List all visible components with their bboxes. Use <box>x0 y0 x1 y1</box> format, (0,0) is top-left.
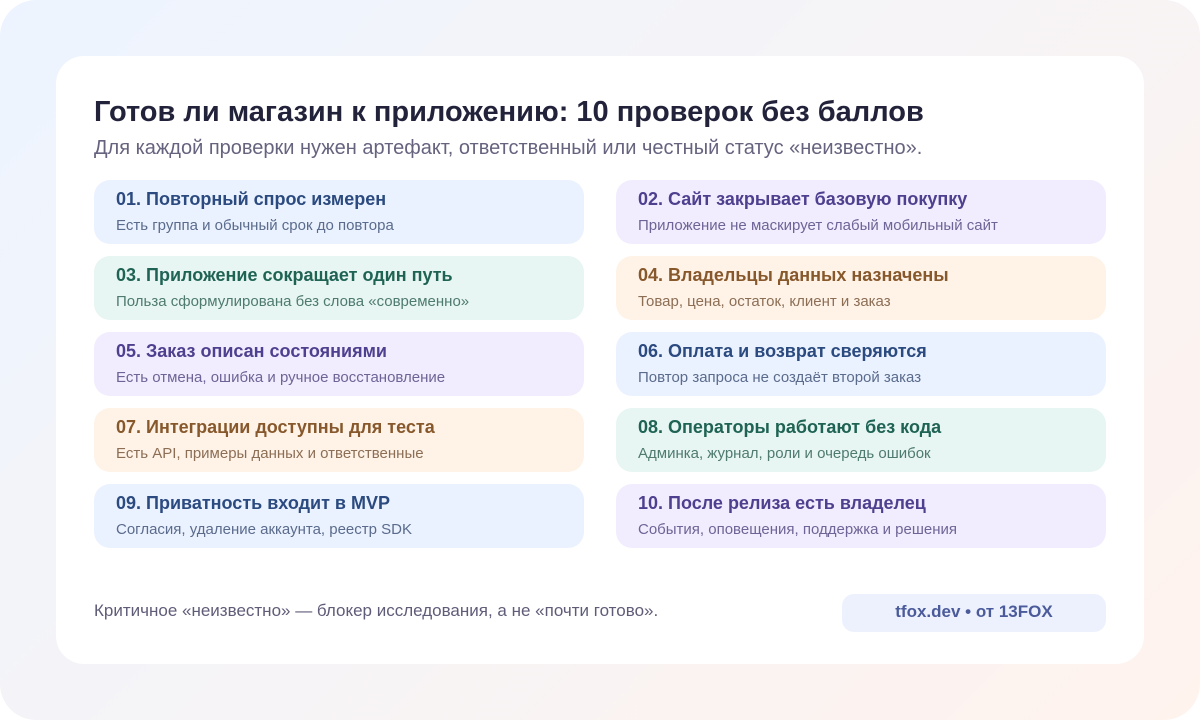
panel: main card <box>56 56 1144 664</box>
check 08 <box>616 408 1106 472</box>
footer note: Критичное «неизвестно» — блокер исследования, а не «почти готово». <box>94 601 658 620</box>
check 05: Есть отмена, ошибка и ручное восстановление <box>116 369 445 386</box>
check 06: Повтор запроса не создаёт второй заказ <box>638 369 921 386</box>
subtitle: Для каждой проверки нужен артефакт, ответственный или честный статус «неизвестно». <box>94 137 922 159</box>
check 03: Польза сформулирована без слова «современно» <box>116 293 469 310</box>
check 04 <box>616 256 1106 320</box>
check 06 <box>616 332 1106 396</box>
check 10: События, оповещения, поддержка и решения <box>638 521 957 538</box>
brand badge: tfox.dev • от 13FOX <box>895 602 1053 621</box>
check 01: Есть группа и обычный срок до повтора <box>116 217 394 234</box>
check 07: Есть API, примеры данных и ответственные <box>116 445 424 462</box>
check 07: 07. Интеграции доступны для теста <box>116 417 435 437</box>
check 10 <box>616 484 1106 548</box>
check 02: Приложение не маскирует слабый мобильный сайт <box>638 217 998 234</box>
check 05 <box>94 332 584 396</box>
check 08: Админка, журнал, роли и очередь ошибок <box>638 445 931 462</box>
check 04: 04. Владельцы данных назначены <box>638 265 949 285</box>
check 03: 03. Приложение сокращает один путь <box>116 265 453 285</box>
check 08: 08. Операторы работают без кода <box>638 417 941 437</box>
check 01: 01. Повторный спрос измерен <box>116 189 386 209</box>
check 09: 09. Приватность входит в MVP <box>116 493 390 513</box>
check 09 <box>94 484 584 548</box>
check 03 <box>94 256 584 320</box>
check 02: 02. Сайт закрывает базовую покупку <box>638 189 967 209</box>
title: Готов ли магазин к приложению: 10 проверок без баллов <box>94 96 924 128</box>
check 10: 10. После релиза есть владелец <box>638 493 926 513</box>
check 04: Товар, цена, остаток, клиент и заказ <box>638 293 891 310</box>
check 09: Согласия, удаление аккаунта, реестр SDK <box>116 521 412 538</box>
check 05: 05. Заказ описан состояниями <box>116 341 387 361</box>
check 01 <box>94 180 584 244</box>
check 07 <box>94 408 584 472</box>
check 06: 06. Оплата и возврат сверяются <box>638 341 927 361</box>
brand badge <box>842 594 1106 632</box>
check 02 <box>616 180 1106 244</box>
